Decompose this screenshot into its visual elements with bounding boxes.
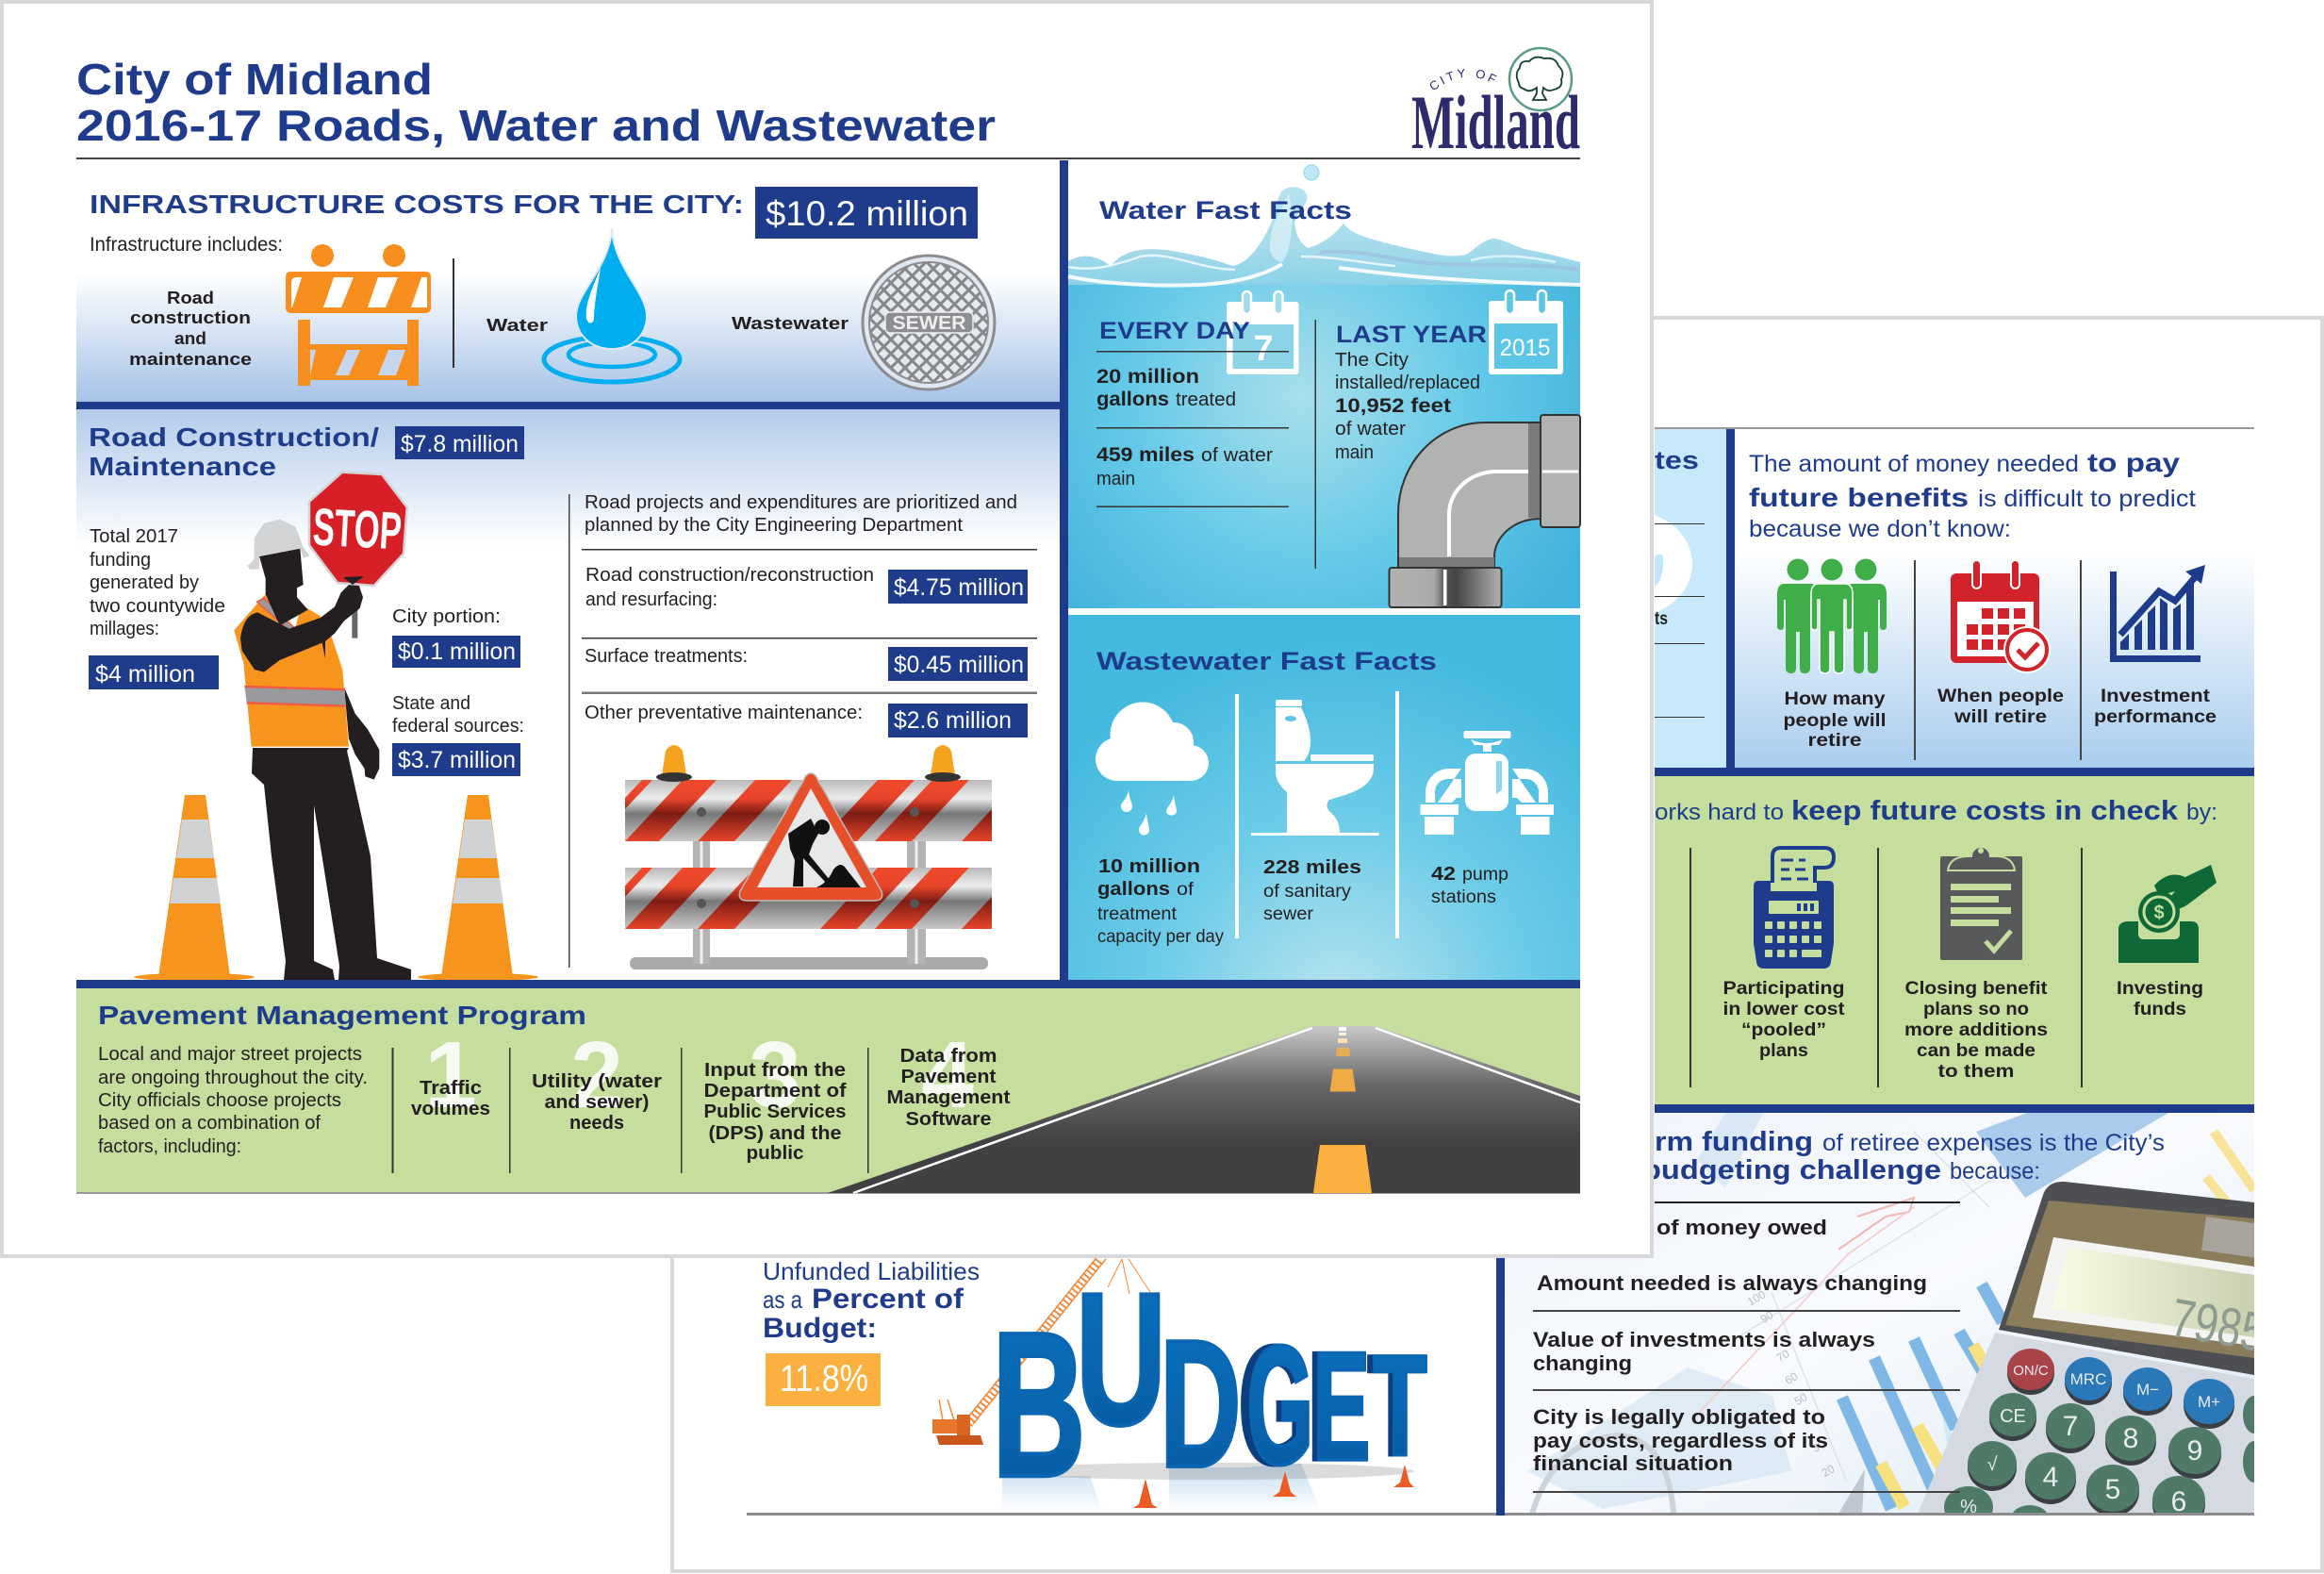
bar: road / pavement divider xyxy=(76,980,1580,988)
panel: retirees facts (light blue, mostly hidden): tes xyxy=(1655,446,1699,474)
label: road construction and maintenance: Road xyxy=(167,289,214,307)
bar: vertical divider road / water xyxy=(1060,160,1068,981)
heading: budgeting challenge xyxy=(1642,1127,2165,1185)
icon: toilet xyxy=(1251,700,1378,836)
text: unfunded liabilities: Budget: xyxy=(763,1313,877,1344)
rule: back page bottom xyxy=(747,1513,2254,1516)
icon: calendar 7 xyxy=(1227,291,1299,374)
label: when people will retire: will retire xyxy=(1953,707,2047,727)
stat: 20 million gallons: 20 million xyxy=(1096,366,1199,388)
factor 1: traffic volumes: volumes xyxy=(411,1099,490,1119)
stat: 11.8% xyxy=(766,1353,881,1406)
text: unfunded liabilities: Percent of xyxy=(812,1284,964,1315)
panel: budgeting challenge with calculator photo xyxy=(1505,1113,2270,1532)
value box: $4 million: $4 million xyxy=(95,661,195,688)
label: participating in pooled plans: “pooled” xyxy=(1741,1020,1826,1040)
illustration: BUDGET crane letters: B xyxy=(992,1288,1086,1520)
icon: orange road barricade xyxy=(286,244,431,386)
value box: $2.6 million xyxy=(888,704,1028,737)
calculator body xyxy=(1918,1333,2254,1514)
text: total 2017 funding: generated by xyxy=(90,572,199,593)
stop sign xyxy=(309,472,407,586)
back page sheet xyxy=(672,318,2322,1571)
text: local and major street projects: based on a combination of xyxy=(98,1113,321,1134)
label: investment performance: performance xyxy=(2094,707,2217,727)
background chart illustration: 100 xyxy=(1745,1287,1768,1309)
icon: clipboard xyxy=(1940,847,2022,960)
text: local and major street projects: Local and major street projects xyxy=(98,1044,362,1065)
label: investment performance xyxy=(2094,687,2217,727)
illustration: BUDGET crane letters: G xyxy=(1246,1312,1314,1500)
factor 4: pavement software: 4 xyxy=(921,1022,974,1128)
stat: 228 miles: of sanitary xyxy=(1263,882,1352,902)
text: other preventative maintenance: Other preventative maintenance: xyxy=(585,703,863,723)
logo: City of Midland xyxy=(1411,47,1580,165)
panel: retirees facts (light blue, mostly hidden): ts xyxy=(1655,609,1668,629)
icon: calendar 2015: 2015 xyxy=(1499,335,1550,361)
text: total 2017 funding: funding xyxy=(90,550,151,571)
letters: G xyxy=(1238,1310,1311,1499)
illustration: BUDGET crane letters: E xyxy=(1312,1320,1370,1494)
text: value of investments xyxy=(1533,1328,1875,1375)
stop sign: STOP xyxy=(311,497,404,560)
factor 3: public input: 3 xyxy=(749,1022,801,1128)
stat: 10,952 feet: of water xyxy=(1335,419,1406,439)
icon: sewer manhole cover: SEWER xyxy=(892,313,966,334)
title: 2016-17 Roads, Water and Wastewater xyxy=(76,101,996,150)
illustration: BUDGET crane letters: U xyxy=(1076,1253,1166,1464)
heading: infrastructure costs: INFRASTRUCTURE COSTS FOR THE CITY: xyxy=(90,190,744,219)
illustration: road xyxy=(828,1026,1580,1193)
raised arm xyxy=(240,577,364,672)
heading: keep future costs in check: orks hard to xyxy=(1655,800,1784,825)
heading: road construction: Road Construction/ xyxy=(89,422,379,452)
heading: pavement management program: Pavement Management Program xyxy=(98,1001,586,1030)
text: infrastructure includes: Infrastructure includes: xyxy=(90,234,283,256)
heading: road construction: Maintenance xyxy=(89,452,276,481)
heading: amount of money needed: to pay xyxy=(2087,448,2180,477)
front page sheet xyxy=(2,2,1652,1256)
calculator buttons: ON/C xyxy=(2013,1363,2049,1379)
label: when people will retire: When people xyxy=(1937,687,2064,706)
text: local and major street projects: are ongoing throughout the city. xyxy=(98,1068,368,1088)
icon: investment chart xyxy=(2110,565,2205,662)
label: road construction and maintenance: maintenance xyxy=(129,350,252,369)
background chart illustration: 50 xyxy=(1792,1390,1810,1408)
icon: adding machine xyxy=(1754,848,1834,969)
divider bar: benefits / green panel xyxy=(1655,768,2254,776)
factor 2: utility needs: needs xyxy=(569,1113,624,1134)
heading: amount of money needed: is difficult to predict xyxy=(1978,486,2196,512)
panel: pavement management program xyxy=(76,988,1580,1194)
warning triangle xyxy=(739,773,882,901)
stat: 10 million gallons: 10 million xyxy=(1098,856,1200,877)
heading: water fast facts: Water Fast Facts xyxy=(1099,196,1352,224)
stat: 228 miles: 228 miles xyxy=(1263,857,1361,878)
heading: road construction xyxy=(89,422,379,481)
icon: sewer manhole cover xyxy=(863,256,995,389)
text: local and major street projects: factors, including: xyxy=(98,1136,241,1157)
factor 1: traffic volumes: Traffic xyxy=(420,1078,482,1099)
heading: keep future costs in check: by: xyxy=(2186,800,2217,825)
illustration: flagger worker with stop sign xyxy=(234,472,411,980)
vest xyxy=(234,594,349,747)
stat: 228 miles xyxy=(1263,857,1361,924)
factor 2: utility needs: 2 xyxy=(570,1022,623,1128)
calculator buttons: 7 xyxy=(2063,1411,2078,1442)
heading: budgeting challenge: because: xyxy=(1950,1158,2040,1185)
icon: hand depositing coin: $ xyxy=(2153,903,2165,923)
heading: amount of money needed: future benefits xyxy=(1749,483,1969,512)
factor 4: pavement software: Software xyxy=(905,1109,992,1130)
traffic cone: left xyxy=(134,795,255,981)
calculator buttons: M+ xyxy=(2198,1393,2220,1411)
text: legally obligated: financial situation xyxy=(1533,1451,1733,1475)
text: road construction/reconstruction xyxy=(585,565,874,610)
heading: last year: LAST YEAR xyxy=(1336,322,1487,348)
label: investing funds: Investing xyxy=(2117,979,2203,999)
value box: $3.7 million: $3.7 million xyxy=(398,747,516,773)
lower right arm xyxy=(344,687,379,780)
label: how many people: people will xyxy=(1784,711,1886,731)
label: state and federal sources: federal sources: xyxy=(392,716,524,737)
label: closing benefit plans: more additions xyxy=(1904,1020,2048,1040)
label: when people will retire xyxy=(1937,687,2064,727)
stat: 10,952 feet: installed/replaced xyxy=(1335,373,1480,393)
stat: 10 million gallons: of xyxy=(1177,880,1195,900)
stat: 20 million gallons: treated xyxy=(1176,389,1236,410)
panel: road construction and maintenance xyxy=(76,409,1060,981)
text: value of investments: changing xyxy=(1533,1351,1632,1375)
text: road construction/reconstruction: and resurfacing: xyxy=(585,589,717,610)
bar: infrastructure / road divider xyxy=(76,402,1060,409)
value box: $2.6 million: $2.6 million xyxy=(894,707,1012,734)
icon: pipe elbow xyxy=(1390,415,1580,607)
reflection xyxy=(1002,1464,1320,1512)
heading: every day: EVERY DAY xyxy=(1099,318,1250,344)
background chart illustration: 90 xyxy=(1758,1308,1776,1326)
stat: 20 million gallons xyxy=(1096,366,1236,410)
stat: 10,952 feet: main xyxy=(1335,442,1374,463)
stat: 459 miles: of water xyxy=(1201,445,1273,466)
factor 3: public input: (DPS) and the xyxy=(709,1123,841,1144)
text: amount needed: Amount needed is always changing xyxy=(1537,1271,1927,1295)
text: road projects prioritized xyxy=(585,492,1017,536)
heading: keep future costs in check: keep future costs in check xyxy=(1791,796,2179,826)
heading: amount of money needed: because we don’t know: xyxy=(1749,516,2011,542)
illustration: BUDGET crane letters: D xyxy=(1160,1303,1242,1506)
panel: wastewater fast facts xyxy=(1068,615,1580,980)
label: participating in pooled plans xyxy=(1723,979,1845,1061)
factor 2: utility needs xyxy=(532,1022,662,1134)
calculator buttons: M− xyxy=(2136,1381,2159,1399)
logo: City of Midland: CITY OF xyxy=(1430,68,1497,90)
label: participating in pooled plans: in lower cost xyxy=(1723,1000,1845,1019)
label: road construction and maintenance xyxy=(129,289,252,369)
label: closing benefit plans xyxy=(1904,979,2048,1082)
heading: amount of money needed xyxy=(1749,448,2196,542)
text: unfunded liabilities: Unfunded Liabilities xyxy=(763,1257,980,1285)
stat: 11.8%: 11.8% xyxy=(780,1358,868,1400)
label: participating in pooled plans: plans xyxy=(1759,1041,1808,1061)
text: unfunded liabilities xyxy=(763,1257,980,1344)
factor 2: utility needs: and sewer) xyxy=(545,1092,649,1113)
sign pole xyxy=(352,562,357,638)
text: of money owed: of money owed xyxy=(1656,1216,1827,1239)
stat: 20 million gallons: gallons xyxy=(1096,389,1169,410)
value box: $0.1 million: $0.1 million xyxy=(398,638,516,665)
label: participating in pooled plans: Participating xyxy=(1723,979,1844,999)
label: wastewater: Wastewater xyxy=(732,314,849,333)
label: state and federal sources xyxy=(392,693,524,737)
label: closing benefit plans: to them xyxy=(1938,1062,2014,1082)
value box: $0.45 million: $0.45 million xyxy=(894,652,1024,678)
stat: 10,952 feet xyxy=(1335,350,1480,463)
head and neck xyxy=(259,549,308,625)
text: total 2017 funding xyxy=(90,526,225,639)
divider bar: green / funding panel xyxy=(1655,1104,2254,1113)
panel: water fast facts xyxy=(1068,165,1580,608)
text: value of investments: Value of investments is always xyxy=(1533,1328,1875,1351)
icon: pump station valve xyxy=(1420,731,1554,835)
calculator buttons: 5 xyxy=(2105,1474,2120,1505)
hard hat xyxy=(247,520,309,570)
panel: future benefits xyxy=(1726,429,2254,768)
factor 3: public input xyxy=(703,1022,847,1164)
small traffic cones xyxy=(1133,1465,1414,1508)
stat: 459 miles: 459 miles xyxy=(1096,444,1195,466)
factor 3: public input: Public Services xyxy=(703,1102,847,1122)
stat: 228 miles: sewer xyxy=(1263,904,1314,924)
calculator buttons: 6 xyxy=(2171,1486,2186,1517)
text: unfunded liabilities: as a xyxy=(763,1285,802,1314)
heading: keep future costs in check xyxy=(1655,796,2217,826)
logo: City of Midland: Midland xyxy=(1411,79,1580,165)
illustration: BUDGET crane letters: T xyxy=(1373,1325,1427,1485)
factor 1: traffic volumes xyxy=(411,1022,490,1128)
stat: 10,952 feet: The City xyxy=(1335,350,1409,371)
calculator buttons: 9 xyxy=(2187,1435,2202,1466)
letters: T xyxy=(1367,1326,1425,1486)
text: road projects prioritized: planned by the City Engineering Department xyxy=(585,515,963,536)
icon: calendar with check xyxy=(1951,560,2051,673)
pen and magnifier xyxy=(1838,1469,1865,1514)
panel: infrastructure costs xyxy=(76,160,1060,402)
stat: 459 miles: main xyxy=(1096,469,1135,489)
rule: back page top xyxy=(1655,427,2254,429)
factor 3: public input: Department of xyxy=(703,1081,847,1102)
icon: calendar 2015 xyxy=(1489,290,1563,374)
calculator readout: 7985 xyxy=(2167,1287,2270,1364)
factor 1: traffic volumes: 1 xyxy=(424,1022,477,1128)
icon: water drop with ripples xyxy=(544,229,680,382)
label: water: Water xyxy=(486,316,548,335)
value box: $10.2 million: $10.2 million xyxy=(766,194,968,233)
background chart illustration xyxy=(1527,1113,2270,1532)
text: local and major street projects: City officials choose projects xyxy=(98,1090,341,1111)
factor 4: pavement software: Pavement xyxy=(901,1067,997,1087)
illustration: BUDGET crane letters xyxy=(932,1253,1427,1520)
calculator buttons: √ xyxy=(1987,1454,1998,1475)
illustration: road work barrier xyxy=(625,745,992,969)
panel: keep future costs in check xyxy=(1655,776,2254,1104)
text: road projects prioritized: Road projects and expenditures are prioritized and xyxy=(585,492,1017,513)
label: closing benefit plans: plans so no xyxy=(1923,1000,2029,1019)
traffic cone: right xyxy=(418,795,538,981)
calculator buttons: MRC xyxy=(2070,1370,2106,1388)
label: road construction and maintenance: and xyxy=(174,329,206,348)
calculator buttons: 8 xyxy=(2123,1423,2138,1454)
factor 4: pavement software: Management xyxy=(886,1087,1011,1108)
label: investing funds: funds xyxy=(2134,1000,2186,1019)
rule: header xyxy=(76,157,1580,159)
icon: rain cloud xyxy=(1096,702,1209,836)
label: closing benefit plans: can be made xyxy=(1917,1041,2036,1061)
pole in hand xyxy=(343,576,364,585)
label: how many people: retire xyxy=(1808,731,1861,751)
crane xyxy=(939,1259,1150,1424)
label: city portion: City portion: xyxy=(392,606,501,627)
calculator buttons: 4 xyxy=(2043,1462,2058,1493)
heading: budgeting challenge: of retiree expenses is the City’s xyxy=(1822,1130,2165,1156)
label: investing funds xyxy=(2117,979,2203,1019)
bar: vertical divider budget/funding xyxy=(1496,1254,1505,1516)
text: legally obligated xyxy=(1533,1405,1828,1475)
text: legally obligated: pay costs, regardless of its xyxy=(1533,1429,1828,1452)
letters: E xyxy=(1307,1320,1371,1494)
title xyxy=(76,55,996,150)
label: investment performance: Investment xyxy=(2101,687,2211,706)
factor 4: pavement software: Data from xyxy=(899,1046,997,1067)
stat: 10 million gallons xyxy=(1097,856,1224,947)
text: total 2017 funding: millages: xyxy=(90,619,159,639)
stat: 10 million gallons: gallons xyxy=(1097,879,1170,900)
value box: $7.8 million: $7.8 million xyxy=(401,431,519,457)
stat: 42 pump stations: stations xyxy=(1431,887,1496,907)
value box: $4 million xyxy=(89,655,219,689)
text: road construction/reconstruction: Road construction/reconstruction xyxy=(585,565,874,586)
calculator buttons xyxy=(1944,1349,2254,1513)
stat: 10,952 feet: 10,952 feet xyxy=(1335,395,1451,417)
stat: 42 pump stations: 42 xyxy=(1431,864,1456,885)
icon: calendar 7: 7 xyxy=(1253,329,1274,369)
label: road construction and maintenance: construction xyxy=(130,308,251,327)
label: how many people: How many xyxy=(1784,689,1886,709)
panel: retirees facts (light blue, mostly hidden) xyxy=(1570,429,1726,768)
factor 2: utility needs: Utility (water xyxy=(532,1071,662,1092)
stat: 42 pump stations xyxy=(1431,864,1508,907)
illustration: water surface splash xyxy=(1068,165,1580,286)
label: closing benefit plans: Closing benefit xyxy=(1904,979,2048,999)
icon: three people xyxy=(1777,558,1887,673)
factor 4: pavement software xyxy=(886,1022,1011,1130)
factor 3: public input: public xyxy=(747,1143,803,1164)
heading: budgeting challenge: rm funding xyxy=(1655,1127,1813,1157)
stat: 459 miles xyxy=(1096,444,1273,489)
stat: 10 million gallons: treatment xyxy=(1097,904,1178,924)
label: state and federal sources: State and xyxy=(392,693,470,714)
calculator buttons: % xyxy=(1960,1497,1977,1517)
background chart illustration: 60 xyxy=(1783,1369,1801,1387)
title: City of Midland xyxy=(76,55,433,104)
text: local and major street projects xyxy=(98,1044,368,1157)
value box: $4.75 million: $4.75 million xyxy=(894,574,1024,601)
icon: hand depositing coin xyxy=(2118,865,2217,963)
stat: 10 million gallons: capacity per day xyxy=(1097,927,1224,947)
calculator buttons: CE xyxy=(2000,1406,2026,1427)
background chart illustration: 70 xyxy=(1774,1347,1792,1365)
text: total 2017 funding: Total 2017 xyxy=(90,526,178,547)
background chart illustration: 20 xyxy=(1820,1462,1838,1480)
warning lights xyxy=(662,745,686,775)
text: surface treatments: Surface treatments: xyxy=(585,646,748,667)
text: total 2017 funding: two countywide xyxy=(90,596,225,617)
background chart illustration: 30 xyxy=(1810,1437,1828,1455)
heading: wastewater fast facts: Wastewater Fast Facts xyxy=(1096,647,1437,675)
factor 3: public input: Input from the xyxy=(704,1060,846,1081)
heading: budgeting challenge: budgeting challenge xyxy=(1642,1155,1941,1185)
letters xyxy=(1238,1310,1425,1499)
text: legally obligated: City is legally obligated to xyxy=(1533,1405,1825,1429)
value box: $10.2 million xyxy=(755,187,978,239)
legs and boots xyxy=(252,748,411,980)
heading: amount of money needed: The amount of money needed xyxy=(1749,451,2079,477)
label: how many people xyxy=(1784,689,1886,751)
stat: 42 pump stations: pump xyxy=(1462,865,1508,885)
